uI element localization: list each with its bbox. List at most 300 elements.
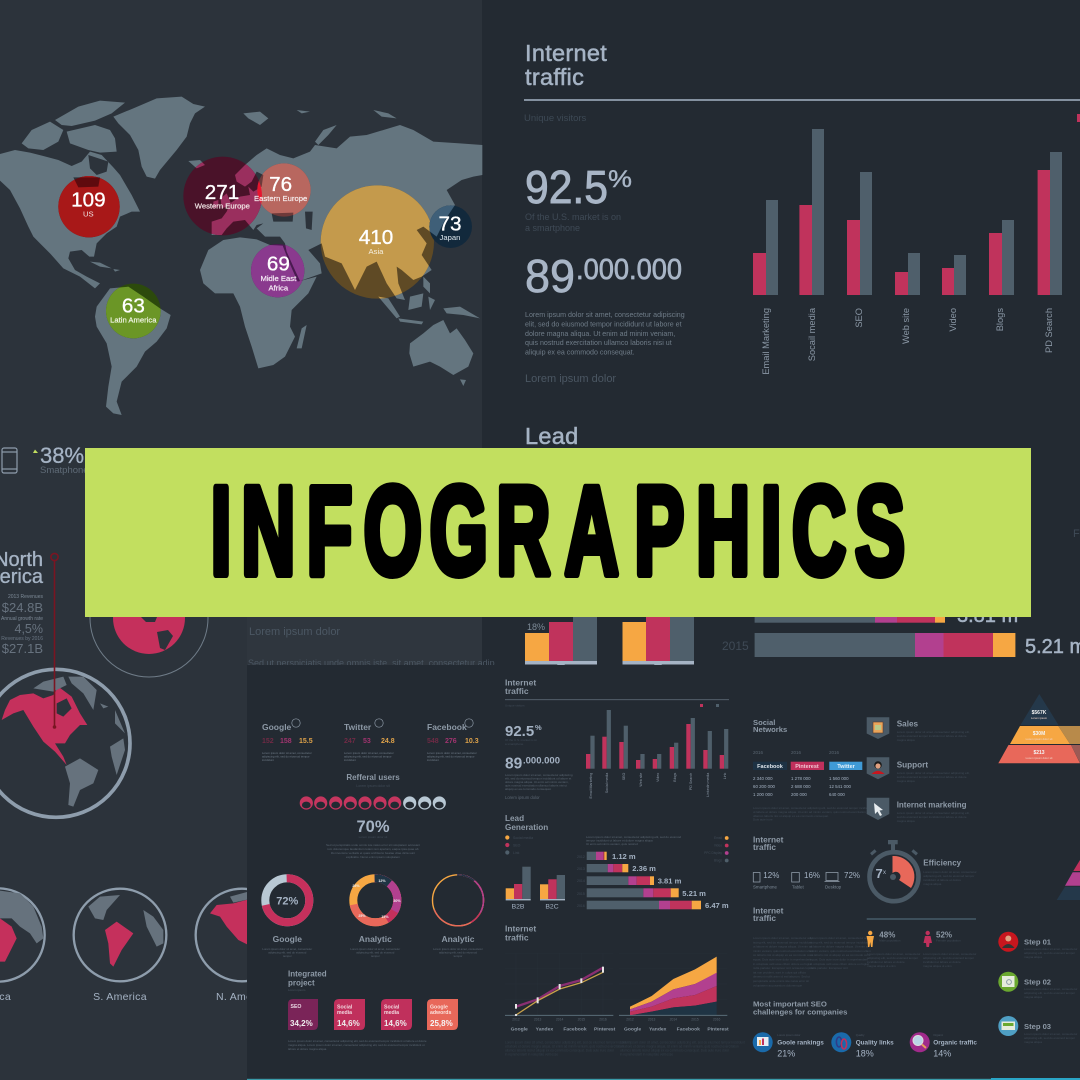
network table: Facebook: [757, 764, 784, 770]
horizontal stacked bars: Email: [714, 836, 722, 840]
chart notes: Lorem ipsum dolor sit amet, consectetur adipiscing elit, sed do eiusmod tempor incididunt: [620, 1040, 745, 1044]
heading: Internet traffic 3: [753, 905, 784, 923]
SEO: Goole rankings: 21%: [777, 1049, 795, 1059]
text columns: voluptatem accusantium doloremque: [753, 983, 802, 987]
horizontal stacked bars: 3.81 m: [658, 877, 682, 886]
bar chart: Video: [656, 773, 660, 782]
stopwatch: [870, 840, 918, 901]
item: Sales: magna aliqua: [897, 738, 915, 742]
Facebook stat: adipiscing elit, sed do eiusmod tempor: [427, 754, 475, 758]
integrated project: Lorem ipsum dolor sit amet, consectetur adipiscing elit, sed do eiusmod tempor incididunt ut labore et dolore: [288, 1039, 427, 1043]
referral users: Lorem ipsum dolor sit: [359, 835, 388, 839]
body text: [525, 311, 685, 356]
network table: 2 340 000: [753, 776, 773, 781]
internet traffic charts heading: [505, 924, 536, 943]
text columns: co laboris nisi ut aliquip ex ea commodo cons: [810, 953, 871, 957]
face icons: [300, 796, 446, 810]
tile: Social media: 14,6%: [337, 1019, 360, 1028]
horizontal stacked bars: 6.47 m: [705, 901, 729, 910]
Google stat: Google: [262, 722, 292, 732]
area chart: 2015: [691, 1017, 699, 1021]
step 02: [998, 972, 1077, 999]
text block: a smartphone: [505, 742, 524, 746]
text block: Of the U.S. market is on: [505, 738, 537, 742]
bottom edge accent: [247, 1078, 1080, 1080]
B2B and B2C columns: B2B: [512, 904, 525, 911]
efficiency text: Efficiency: [923, 859, 962, 868]
gender stats: incididunt ut labore et dolore: [923, 960, 961, 964]
network table: 640 000: [829, 792, 845, 797]
gender stats: Lorem ipsum dolor sit amet, consectetur: [923, 952, 976, 956]
Google stat: incididunt: [262, 758, 274, 762]
bubble: US: 109: [71, 189, 106, 212]
heading: Internet traffic 3: traffic: [753, 913, 776, 923]
text columns: Lorem ipsum dolor sit amet, consectetur adip: [753, 936, 813, 940]
ring: Analytic thin: Analytic: [441, 934, 475, 944]
step 01: adipiscing elit, sed do eiusmod tempor: [1024, 951, 1075, 955]
tile: Google adwords: adwords: [430, 1010, 451, 1016]
text columns: nulla pariatur. Excepteur sint: [810, 966, 848, 970]
ring: Analytic thin: [432, 875, 484, 958]
ring: Analytic thin: adipiscing elit, sed do eiusmod: [439, 950, 477, 954]
line and area charts: [505, 953, 745, 1056]
North America landmass: [2, 687, 87, 765]
bar chart: Link: [723, 772, 727, 779]
chart notes: ut labore et dolore magna aliqua. Ut enim ad minim veniam, quis nostrud exercitation: [505, 1044, 624, 1048]
step 02: adipiscing elit, sed do eiusmod tempor: [1024, 991, 1075, 995]
internet traffic charts heading: traffic: [505, 933, 529, 943]
donut: Analytic segmented: tempor: [371, 954, 380, 958]
globe: big North America: [0, 669, 130, 817]
step 03: Step 03: [1024, 1022, 1051, 1031]
chart notes: ullamco laboris nisi ut aliquip ex ea commodo consequat. Duis aute irure dolor: [505, 1048, 614, 1052]
banner: INFOGRAPHICS: INFOGRAPHICS: [211, 461, 905, 601]
step 03: Lorem ipsum dolor sit amet, consectetur: [1024, 1032, 1077, 1036]
text block: quis nostrud exercitation ullamco laboris nisi ut: [505, 784, 567, 788]
donut: Google 72%: 72%: [276, 896, 299, 908]
donut: Analytic segmented: [350, 878, 401, 958]
devices: 72%: [844, 871, 860, 880]
lead generation heading: Generation: [505, 823, 548, 832]
stacked columns: [525, 610, 694, 668]
panel: mid band with lorem text: Lorem ipsum dolor: [249, 626, 340, 638]
horizontal stacked bars: [577, 835, 729, 910]
donut: Analytic segmented: adipiscing elit, sed do eiusmod: [356, 950, 395, 954]
legend dots: Social media: [513, 836, 533, 840]
tile: Google adwords: [427, 999, 458, 1030]
bubble: Eastern Europe: 76: [269, 173, 292, 196]
Google stat: 15.5: [299, 738, 313, 745]
gender stats: 52%: [936, 930, 952, 940]
gender stats: adipiscing elit, sed do eiusmod tempor: [867, 956, 918, 960]
bar chart: Email Marketing: [589, 773, 593, 798]
donut: Google 72%: Lorem ipsum dolor sit amet, consectetur: [262, 947, 312, 951]
heading: traffic: [525, 64, 584, 90]
stats: 92.5: [505, 723, 534, 740]
stat 89.000.000: 89: [525, 250, 575, 302]
bubble: US: [58, 176, 120, 238]
gender stats: adipiscing elit, sed do eiusmod tempor: [923, 956, 974, 960]
heading: [505, 678, 536, 696]
donut: Analytic segmented: 25%: [358, 914, 366, 918]
bubble: Asia: Asia: [369, 247, 384, 256]
bubble: Latin America: Latin America: [110, 315, 157, 324]
bubble: Middle East Africa: Africa: [269, 284, 289, 293]
text columns: [753, 936, 871, 987]
horizontal stacked bars: Ut enim ad minim veniam, quis nostrud: [586, 842, 638, 846]
line chart: 2013: [534, 1017, 542, 1021]
integrated project: project: [288, 978, 315, 988]
referral users: [300, 773, 446, 859]
stopwatch: x: [883, 870, 886, 876]
donut: Analytic segmented: 30%: [393, 899, 401, 903]
stat: 38% smartphone: [2, 443, 89, 476]
bar chart: Blogs: [995, 308, 1005, 331]
gender stats: Lorem ipsum dolor sit amet, consectetur: [867, 952, 920, 956]
Facebook stat: [427, 719, 479, 762]
text columns: minim veniam, quis nostrud exercitation ullam: [810, 949, 871, 953]
lead generation heading: [505, 814, 548, 832]
bubble: Latin America: [106, 284, 161, 338]
line chart: 2016: [599, 1017, 607, 1021]
text columns: equat. Duis aute irure dolor in reprehenderit: [810, 958, 868, 962]
line chart: 2015: [578, 1017, 585, 1021]
item: Internet marketing: magna aliqua: [897, 819, 915, 823]
horizontal stacked bars: Lorem ipsum dolor sit amet, consectetur adipiscing elit, sed do eiusmod: [586, 835, 681, 839]
item: Support: sed do eiusmod tempor incididunt ut labore et dolore: [897, 775, 967, 779]
area chart: 2012: [626, 1017, 634, 1021]
devices: [753, 871, 860, 890]
text columns: tat non proident, sunt in culpa qui officia: [753, 970, 806, 974]
area chart: Yandex: [649, 1027, 667, 1033]
Google stat: adipiscing elit, sed do eiusmod tempor: [262, 754, 310, 758]
revenue stats: Revenues by 2016: [1, 636, 43, 642]
stacked columns: 18%: [527, 622, 545, 632]
devices: Smartphone: [753, 884, 777, 890]
caption: Unique visitors: [524, 113, 587, 124]
donut: Google 72%: [262, 878, 312, 958]
heading and stats: North America: [0, 549, 44, 656]
title: [0, 549, 44, 588]
stats: .000.000: [523, 756, 560, 766]
SEO: Organic traffic: 14%: [933, 1049, 951, 1059]
network table: 2016: [829, 750, 840, 755]
stat 89.000.000: .000.000: [576, 254, 682, 286]
horizontal stacked bars: 2016: [577, 904, 585, 908]
horizontal stacked bars: 5.21 m: [682, 889, 706, 898]
network table: 1 278 000: [791, 776, 811, 781]
line chart: [505, 953, 616, 1033]
bar chart: Social media: [605, 773, 609, 793]
devices: Desktop: [825, 884, 842, 890]
item: Internet marketing: Lorem ipsum dolor sit amet, consectetur adipiscing elit,: [897, 811, 970, 815]
heading: Internet traffic: [753, 835, 784, 852]
icon: up triangle: [33, 450, 38, 453]
background: left dark panel: [0, 0, 482, 1080]
icon: woman: [924, 931, 932, 947]
Twitter stat: adipiscing elit, sed do eiusmod tempor: [344, 754, 392, 758]
Facebook stat: Lorem ipsum dolor sit amet, consectetur: [427, 751, 477, 755]
SEO: Quality links: [831, 1032, 894, 1059]
heading: Lead: Lead: [525, 423, 578, 449]
horizontal stacked bars: Blogs: [714, 858, 722, 862]
chart notes: Lorem ipsum dolor sit amet, consectetur adipiscing elit, sed do eiusmod tempor incididunt: [505, 1040, 630, 1044]
area chart: 2013: [648, 1017, 656, 1021]
network table: Duis aute irure: [753, 818, 773, 822]
Twitter stat: 247: [344, 738, 356, 745]
globe: Africa, cropped at left: [0, 888, 45, 982]
horizontal stacked bars: tempor incididunt ut labore et dolore magna aliqua: [586, 838, 653, 842]
integrated project: Integrated: [288, 970, 327, 979]
referral users: Sed ut perspiciatis unde omnis iste natus error sit voluptatem accusant: [326, 843, 420, 847]
network table: 1 560 000: [829, 776, 849, 781]
efficiency text: adipiscing elit, sed do eiusmod tempor: [923, 874, 974, 878]
donut: Analytic segmented: Analytic: [359, 934, 392, 944]
body text: elit, sed do eiusmod tempor incididunt ut labore et: [525, 320, 682, 328]
item: Sales: [867, 717, 970, 742]
lead generation heading: Lead: [505, 814, 524, 823]
heading: Internet traffic: Internet: [753, 835, 784, 845]
SEO: Goole rankings: Goole rankings: [777, 1039, 824, 1046]
column 1: social stats: [262, 719, 484, 1051]
heading: SEO challenges: [753, 1000, 847, 1016]
chart notes: in reprehenderit in voluptate velit esse: [620, 1052, 673, 1056]
bubble: Middle East Africa: Midle East: [260, 274, 297, 283]
other continents: [33, 677, 125, 807]
Google stat: 158: [280, 738, 292, 745]
horizontal stacked bars: Video: [714, 844, 722, 848]
pyramid 1: $567K: [1032, 710, 1047, 716]
area chart: Facebook: [677, 1027, 700, 1033]
donut: Google 72%: adipiscing elit, sed do eiusmod: [268, 950, 307, 954]
bubble: Eastern Europe: Eastern Europe: [254, 194, 307, 203]
tile: Social media: Social: [337, 1004, 353, 1010]
bar chart: Web site: [901, 308, 911, 344]
text block: dolore magna aliqua. Ut enim ad minim veniam,: [505, 780, 569, 784]
icon: smartphone: [2, 448, 17, 473]
Google stat: Lorem ipsum dolor sit amet, consectetur: [262, 751, 312, 755]
item: Support: Support: [897, 760, 928, 770]
bubble: Japan: [429, 205, 472, 248]
step 01: Lorem ipsum dolor sit amet, consectetur: [1024, 947, 1077, 951]
network table: 2 688 000: [791, 784, 811, 789]
integrated project: labore et dolore magna aliqua.: [288, 1047, 327, 1051]
heading: Internet: [525, 40, 607, 66]
devices: 16%: [804, 871, 820, 880]
network table: ullamco laboris nisi ut aliquip ex ea commodo consequat.: [753, 814, 829, 818]
step 03: magna aliqua: [1024, 1040, 1042, 1044]
step 01: Step 01: [1024, 938, 1052, 946]
Twitter stat: 53: [363, 738, 371, 745]
text columns: in voluptate velit esse cillum dolore eu fugiat: [753, 962, 812, 966]
Google stat: 152: [262, 738, 274, 745]
pyramid 2: [1057, 860, 1080, 900]
step 02: magna aliqua: [1024, 995, 1042, 999]
stacked bars: 2015: [722, 639, 749, 653]
heading: SEO challenges: Most important SEO: [753, 1000, 827, 1009]
referral users: illo inventore veritatis et quasi architecto beatae vitae dicta sunt: [331, 851, 415, 855]
Twitter stat: incididunt: [344, 758, 356, 762]
pyramid 1: $213: [1033, 750, 1045, 756]
text columns: in voluptate velit esse cillum dolore eu fugiat: [810, 962, 869, 966]
stat caption: [525, 212, 621, 233]
bar chart: Linkedin media: [706, 773, 710, 797]
banner: INFOGRAPHICS: [85, 448, 1031, 617]
stats: [505, 723, 560, 772]
icon: man: [866, 931, 874, 947]
pyramid 1: [998, 694, 1080, 763]
chart notes: in reprehenderit in voluptate velit esse: [505, 1052, 558, 1056]
bubble: Latin America: 63: [122, 294, 145, 317]
bar chart: SEO: [622, 772, 626, 780]
donut: Google 72%: tempor: [283, 954, 292, 958]
tile: Social media 2: media: [384, 1010, 399, 1016]
network table: 60 200 000: [753, 784, 776, 789]
heading: Social Networks: Social: [753, 718, 775, 727]
cut label: F: [1073, 528, 1080, 540]
referral users: Lorem ipsum dolor sit: [356, 784, 390, 788]
referral users: explicabo. Nemo enim ipsam voluptatem: [346, 855, 401, 859]
item: Sales: Sales: [897, 720, 919, 729]
bubble: Eastern Europe: [254, 163, 311, 217]
bar chart: Socail media: [807, 307, 817, 361]
legend: [700, 704, 719, 707]
item: Internet marketing: Internet marketing: [897, 800, 967, 810]
text block: Lorem ipsum dolor: [505, 795, 540, 800]
line chart: Google: [511, 1027, 528, 1033]
heading: Internet traffic: traffic: [753, 842, 776, 852]
text block: [505, 704, 573, 800]
line chart: Yandex: [536, 1027, 553, 1033]
item: Sales: Lorem ipsum dolor sit amet, consectetur adipiscing elit,: [897, 730, 970, 734]
line chart: Pinterest: [594, 1027, 616, 1033]
network table: Lorem ipsum dolor sit amet, consectetur adipiscing elit, sed do eiusmod tempor incididunt: [753, 806, 872, 810]
SEO: Quality links: 18%: [856, 1049, 874, 1059]
bubble: Western Europe: Western Europe: [195, 201, 250, 210]
SEO: Goole rankings: Lorem ipsum dolor: [777, 1033, 801, 1037]
network table: Pinterest: [795, 764, 819, 770]
tile: SEO: SEO: [290, 1004, 301, 1010]
internet traffic charts heading: Internet: [505, 924, 536, 934]
stacked bars: [722, 605, 1080, 658]
integrated project: [288, 970, 458, 1051]
stat 92.5%: %: [608, 166, 632, 193]
bar chart: SEO: [854, 308, 864, 328]
donut: Analytic segmented: 12%: [378, 879, 386, 883]
heading: [525, 40, 607, 90]
tile: SEO: 34,2%: [290, 1019, 313, 1028]
Facebook stat: 10.3: [465, 738, 479, 745]
area chart: Pinterest: [707, 1027, 729, 1033]
stats: %: [535, 723, 542, 732]
SEO: Organic traffic: Organic: [933, 1033, 944, 1037]
revenue stats: [1, 594, 43, 656]
area chart: 2014: [670, 1017, 677, 1021]
column 3: networks and services: [753, 717, 977, 1059]
revenue stats: 4,5%: [14, 622, 43, 636]
text columns: ut labore et dolore magna aliqua. Ut enim ad: [753, 945, 813, 949]
horizontal stacked bars: 2013: [577, 867, 585, 871]
SEO: Quality links: Quality links: [856, 1039, 894, 1046]
referral users: ium doloremque laudantium totam rem aperiam, eaque ipsa quae ab: [327, 847, 419, 851]
tile: Social media 2: Social: [384, 1004, 400, 1010]
text block: Lorem ipsum dolor sit amet, consectetur adipiscing: [505, 773, 573, 777]
text block: Unique visitors: [505, 704, 525, 708]
area chart: 2016: [713, 1017, 721, 1021]
horizontal stacked bars: 2014: [577, 879, 585, 883]
bar chart: Email Marketing: [761, 308, 771, 375]
bar chart: [753, 114, 1080, 375]
label: S. America: S. America: [93, 991, 147, 1003]
devices: 12%: [763, 871, 779, 880]
line chart: 2014: [556, 1017, 564, 1021]
bubble: Japan: Japan: [440, 233, 460, 242]
panel: mid band with lorem text: [247, 617, 495, 668]
Facebook stat: Facebook: [427, 722, 467, 732]
legend dots: SEO: [513, 844, 521, 848]
bubble: Middle East Africa: [251, 244, 304, 298]
gender stats: magna aliqua ut enim: [923, 964, 952, 968]
text block: elit, sed do eiusmod tempor incididunt ut labore et: [505, 776, 571, 780]
step 02: Lorem ipsum dolor sit amet, consectetur: [1024, 987, 1077, 991]
network table: ut labore et dolore magna aliqua. Ut enim ad minim veniam, quis nostrud exercitation: [753, 810, 866, 814]
integrated project: Lorem ipsum: [288, 988, 306, 992]
heading: traffic: [505, 686, 529, 696]
bubble: Western Europe: 271: [205, 181, 239, 204]
stat caption: a smartphone: [525, 223, 580, 233]
globe: North America small: [196, 889, 288, 981]
stacked bars: 3.81 m: [957, 605, 1018, 627]
efficiency text: [923, 859, 977, 886]
text block: aliquip ex ea commodo consequat.: [505, 787, 552, 791]
donut: Analytic segmented: 15%: [381, 915, 389, 919]
panel: right top internet traffic: [524, 40, 1080, 449]
body text: quis nostrud exercitation ullamco laboris nisi ut: [525, 339, 672, 347]
heading: Internet: [505, 678, 536, 688]
map land: [0, 97, 482, 415]
text columns: ut labore et dolore magna aliqua. Ut enim ad: [810, 945, 870, 949]
B2B and B2C columns: B2C: [545, 904, 559, 911]
gender stats: [866, 919, 976, 968]
revenue stats: $24.8B: [2, 600, 43, 615]
background: right top panel: [482, 0, 1080, 670]
tile: Google adwords: Google: [430, 1004, 448, 1010]
sub heading: Lorem ipsum dolor: [525, 373, 616, 385]
heading: Social Networks: Networks: [753, 725, 787, 734]
heading: SEO challenges: challenges for companies: [753, 1007, 847, 1016]
label: N. America: N. America: [216, 991, 270, 1003]
panel: lower infographic card: [247, 665, 1080, 1080]
step 03: adipiscing elit, sed do eiusmod tempor: [1024, 1036, 1075, 1040]
text columns: co laboris nisi ut aliquip ex ea commodo cons: [753, 953, 814, 957]
revenue stats: $27.1B: [2, 641, 43, 656]
SEO: Organic traffic: Organic traffic: [933, 1039, 977, 1046]
globe: South America: [74, 889, 166, 981]
Google stat: [262, 719, 313, 762]
network table: 12 541 000: [829, 784, 852, 789]
heading: Internet traffic 3: Internet: [753, 905, 784, 915]
referral users: 70%: [356, 818, 390, 836]
Facebook stat: incididunt: [427, 758, 439, 762]
pin line over big globe: [51, 553, 58, 729]
step 01: magna aliqua: [1024, 955, 1042, 959]
area chart: Google: [624, 1027, 641, 1033]
tile: SEO: [288, 999, 318, 1030]
donut: Google 72%: Google: [273, 934, 302, 944]
donut: Analytic segmented: Lorem ipsum dolor sit amet, consectetur: [350, 947, 400, 951]
gender stats: Male population: [879, 938, 901, 942]
step 03: [998, 1016, 1077, 1044]
